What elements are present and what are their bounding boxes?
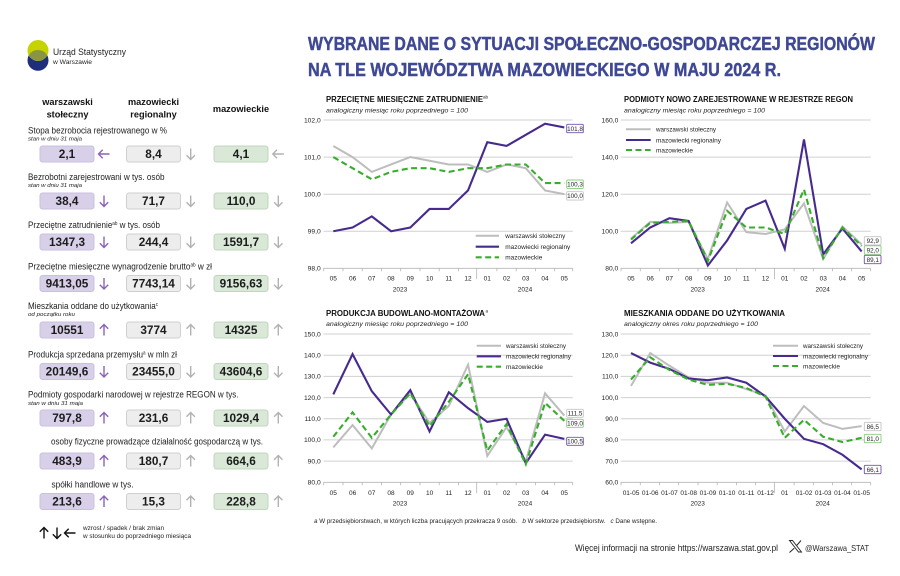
value labels: 89,1 [867, 257, 879, 264]
x axis labels: 10 [426, 490, 434, 497]
chart heading [624, 308, 785, 328]
x axis labels: 09 [704, 276, 712, 282]
x axis labels: 12 [762, 276, 769, 282]
panel: stopa bezrobocia: 4,1 [233, 147, 250, 161]
series: mazowiecki regionalny [631, 353, 862, 469]
legend: mazowiecki regionalny [505, 244, 571, 251]
panel: spółki handlowe [40, 480, 282, 510]
legend: mazowieckie [506, 364, 543, 371]
x axis labels: 08 [387, 490, 395, 497]
panel: produkcja sprzedana: 23455,0 [132, 365, 175, 379]
panel: spółki handlowe: 228,8 [226, 495, 256, 509]
panel: wynagrodzenie brutto [28, 262, 282, 292]
panel: mieszkania oddane [28, 301, 282, 338]
title [308, 33, 875, 80]
y axis labels: 120,0 [304, 395, 321, 402]
x axis labels [623, 490, 870, 508]
x axis labels: 07 [666, 276, 673, 282]
chart: mieszkania oddane do użytkowania [602, 308, 881, 508]
panel: przeciętne zatrudnienie: w tys. osób [117, 220, 160, 230]
panel: spółki handlowe: 213,6 [52, 495, 82, 509]
y axis labels: 160,0 [602, 117, 619, 124]
value labels [864, 237, 881, 264]
x axis labels: 12 [464, 276, 472, 282]
x axis labels: 06 [349, 276, 357, 282]
panel: osoby fizyczne: osoby fizyczne prowadzące działalność gospodarczą w tys. [51, 436, 263, 446]
y axis labels: 140,0 [602, 154, 619, 161]
logo: Urząd Statystyczny w Warszawie: w Warszawie [52, 59, 92, 66]
panel: bezrobotni zarejestrowani: 38,4 [56, 194, 79, 208]
series: mazowieckie [631, 189, 862, 261]
x axis labels: 04 [839, 276, 846, 282]
panel: przeciętne zatrudnienie: ab [112, 221, 118, 227]
x axis labels: 07 [368, 490, 376, 497]
logo: Urząd Statystyczny w Warszawie [28, 40, 126, 71]
y axis labels: 110,0 [602, 374, 619, 381]
x axis labels: 07 [368, 276, 376, 282]
y axis labels: 110,0 [304, 416, 321, 423]
y axis labels [602, 331, 619, 487]
y axis labels: 60,0 [605, 480, 619, 487]
chart heading [326, 94, 489, 114]
x axis labels: 04 [541, 276, 549, 282]
chart heading: a [486, 308, 488, 314]
x axis labels: 09 [407, 276, 414, 282]
series: warszawski stołeczny [333, 146, 564, 194]
panel: stopa bezrobocia: 8,4 [145, 147, 162, 161]
x axis labels: 04 [541, 490, 549, 497]
x axis labels: 11 [445, 276, 453, 282]
panel: osoby fizyczne [40, 436, 282, 469]
panel: stopa bezrobocia: Stopa bezrobocia rejestrowanego w % [28, 126, 167, 136]
x axis labels: 05 [858, 276, 866, 282]
y axis labels: 80,0 [605, 437, 619, 444]
x axis labels: 06 [349, 490, 357, 497]
x axis labels: 01-05 [853, 490, 870, 497]
panel: mieszkania oddane: 3774 [140, 323, 167, 337]
legend: mazowiecki regionalny [803, 353, 869, 360]
legend: warszawski stołeczny [504, 233, 566, 240]
x axis labels: 12 [464, 490, 472, 497]
x axis labels: 01 [781, 490, 789, 497]
x axis labels: 10 [723, 276, 731, 282]
panel: przeciętne zatrudnienie [28, 220, 282, 250]
x axis labels: 01-06 [642, 490, 659, 497]
chart: podmioty nowo zarejestrowane [602, 94, 881, 294]
value labels: 100,3 [567, 182, 583, 188]
x axis labels: 01-11 [738, 490, 755, 497]
x axis labels: 03 [522, 490, 530, 497]
x axis labels: 01-02 [796, 490, 813, 497]
y axis labels: 98,0 [308, 266, 321, 273]
panel: produkcja sprzedana: 20149,6 [46, 365, 89, 379]
x axis labels: 2023 [393, 286, 408, 294]
y axis labels: 140,0 [304, 352, 321, 360]
y axis labels: 150,0 [304, 331, 321, 338]
panel: bezrobotni zarejestrowani: 71,7 [142, 194, 165, 208]
column headings [41, 97, 269, 120]
chart heading: analogiczny miesiąc roku poprzedniego = 100 [326, 321, 468, 328]
series: mazowiecki regionalny [631, 139, 862, 265]
x axis labels: 01-07 [661, 490, 678, 497]
legend: mazowieckie [656, 147, 693, 154]
value labels: 109,0 [567, 421, 583, 428]
x axis labels: 01 [484, 490, 491, 497]
x axis labels [330, 490, 568, 508]
y axis labels: 100,0 [304, 192, 321, 198]
y axis labels: 130,0 [304, 374, 321, 381]
panel: podmioty REGON: 1029,4 [223, 411, 259, 425]
x axis labels: 01-08 [680, 490, 697, 497]
series: mazowieckie [333, 157, 564, 183]
series: warszawski stołeczny [631, 202, 862, 259]
panel: wynagrodzenie brutto: 7743,14 [132, 277, 175, 291]
panel: wynagrodzenie brutto: w zł [196, 262, 212, 272]
panel: produkcja sprzedana [28, 350, 282, 380]
value labels: 111,5 [568, 411, 583, 418]
panel: produkcja sprzedana: a [143, 350, 146, 356]
panel: przeciętne zatrudnienie: 1347,3 [49, 235, 85, 249]
value labels [567, 409, 583, 446]
x axis labels: 2024 [518, 286, 533, 294]
panel: osoby fizyczne: 483,9 [52, 454, 82, 468]
x axis labels: 01 [781, 276, 789, 282]
x axis labels [330, 276, 568, 294]
x axis labels: 03 [522, 276, 530, 282]
x axis labels: 02 [800, 276, 808, 282]
x axis labels: 01-04 [834, 490, 851, 497]
panel: osoby fizyczne: 664,6 [226, 454, 256, 468]
chart heading: analogiczny miesiąc roku poprzedniego = 100 [326, 107, 468, 114]
value labels: 92,0 [867, 247, 879, 254]
x axis labels: 11 [445, 490, 453, 497]
value labels: 100,5 [567, 439, 583, 446]
panel: podmioty REGON: Podmioty gospodarki narodowej w rejestrze REGON w tys. [28, 390, 238, 400]
panel: osoby fizyczne: 180,7 [139, 454, 169, 468]
x axis labels: 01-10 [719, 490, 736, 497]
title: NA TLE WOJEWÓDZTWA MAZOWIECKIEGO W MAJU 2024 R. [308, 59, 781, 80]
x axis labels: 01-03 [815, 490, 832, 497]
y axis labels [602, 117, 619, 273]
panel: bezrobotni zarejestrowani: stan w dniu 31 maja [28, 183, 82, 189]
x axis labels: 01-05 [623, 490, 640, 497]
x axis labels: 05 [561, 490, 568, 497]
x axis labels: 11 [743, 276, 750, 282]
value labels: 100,0 [567, 193, 583, 200]
x axis labels [627, 276, 866, 294]
column headings: regionalny [130, 110, 178, 120]
panel: przeciętne zatrudnienie: 244,4 [139, 235, 169, 249]
panel: bezrobotni zarejestrowani [28, 172, 282, 209]
legend: warszawski stołeczny [655, 127, 717, 134]
series: warszawski stołeczny [631, 353, 862, 431]
x axis labels: 01-12 [757, 490, 774, 497]
panel: mieszkania oddane: 14325 [225, 323, 258, 337]
x axis labels: 05 [627, 276, 635, 282]
legend: mazowieckie [803, 363, 840, 370]
x axis labels: 08 [685, 276, 693, 282]
y axis labels: 130,0 [602, 331, 619, 338]
x axis labels: 2024 [815, 500, 830, 508]
x axis labels: 06 [647, 276, 654, 282]
legend [476, 233, 571, 262]
value labels: 81,0 [867, 436, 879, 443]
column headings: stołeczny [47, 110, 89, 120]
column headings: warszawski [41, 97, 93, 107]
legend: warszawski stołeczny [505, 343, 567, 350]
legend [773, 343, 869, 370]
y axis labels [304, 117, 321, 273]
panel: mieszkania oddane: c [156, 302, 158, 308]
chart heading [624, 94, 853, 114]
footnote: a W przedsiębiorstwach, w których liczba pracujących przekracza 9 osób. b W sektorze przedsiębiorstw. c Dane wstępne. [314, 518, 657, 525]
legend: warszawski stołeczny [802, 343, 864, 350]
panel: wynagrodzenie brutto: 9156,63 [220, 277, 263, 291]
x axis labels: 2023 [393, 500, 408, 508]
y axis labels: 80,0 [605, 266, 619, 273]
value labels: 86,5 [867, 424, 879, 431]
legend: mazowieckie [505, 255, 543, 262]
y axis labels: 99,0 [308, 228, 321, 236]
panel: mieszkania oddane: Mieszkania oddane do użytkowania [28, 301, 167, 311]
series: mazowiecki regionalny [333, 354, 564, 463]
y axis labels: 100,0 [602, 395, 619, 402]
x axis labels: 08 [387, 276, 395, 282]
column headings: mazowieckie [213, 104, 269, 114]
y axis labels [304, 331, 321, 487]
y axis labels: 80,0 [308, 480, 321, 487]
arrow legend: wzrost / spadek / brak zmian [82, 525, 164, 532]
arrow legend: w stosunku do poprzedniego miesiąca [82, 533, 191, 540]
x axis labels: 05 [330, 276, 337, 282]
icon: X [790, 540, 802, 552]
y axis labels: 90,0 [605, 416, 619, 423]
panel: wynagrodzenie brutto: 9413,05 [46, 277, 89, 291]
y axis labels: 90,0 [308, 458, 321, 465]
x axis labels: 2024 [815, 286, 830, 294]
series: mazowieckie [631, 357, 862, 442]
chart heading: PRODUKCJA BUDOWLANO-MONTAŻOWA [326, 308, 485, 318]
panel: wynagrodzenie brutto: Przeciętne miesięczne wynagrodzenie brutto [28, 262, 203, 272]
y axis labels: 101,0 [304, 154, 321, 161]
panel: bezrobotni zarejestrowani: 110,0 [227, 194, 256, 208]
panel: stopa bezrobocia: stan w dniu 31 maja [28, 136, 82, 142]
y axis labels: 100,0 [304, 437, 321, 444]
footer link: Więcej informacji na stronie https://warszawa.stat.gov.pl [575, 543, 778, 553]
panel: produkcja sprzedana: 43604,6 [220, 365, 263, 379]
panel: podmioty REGON: 231,6 [139, 411, 169, 425]
series: warszawski stołeczny [333, 365, 564, 461]
chart: przeciętne miesięczne zatrudnienie [304, 94, 583, 294]
panel: podmioty REGON [28, 390, 282, 426]
value labels: 92,9 [867, 238, 879, 245]
x axis labels: 02 [503, 276, 511, 282]
series: mazowiecki regionalny [333, 124, 564, 231]
legend [477, 343, 572, 371]
y axis labels: 120,0 [602, 192, 619, 198]
x axis labels: 01 [484, 276, 491, 282]
panel: przeciętne zatrudnienie: Przeciętne zatrudnienie [28, 220, 120, 230]
x axis labels: 10 [426, 276, 434, 282]
panel: podmioty REGON: stan w dniu 31 maja [28, 401, 83, 407]
y axis labels: 120,0 [602, 352, 619, 360]
panel: stopa bezrobocia [28, 126, 284, 162]
x axis labels: 2023 [690, 500, 705, 508]
x axis labels: 2023 [690, 286, 705, 294]
x axis labels: 02 [503, 490, 511, 497]
x axis labels: 09 [407, 490, 414, 497]
chart heading: MIESZKANIA ODDANE DO UŻYTKOWANIA [624, 308, 785, 318]
x axis labels: 01-09 [700, 490, 717, 497]
legend [626, 127, 722, 154]
arrow legend [40, 525, 191, 540]
x axis labels: 03 [820, 276, 827, 282]
chart: produkcja budowlano-montażowa [304, 308, 583, 508]
panel: podmioty REGON: 797,8 [52, 411, 82, 425]
footer handle: @Warszawa_STAT [805, 543, 869, 553]
legend: mazowiecki regionalny [506, 354, 572, 361]
chart heading: analogiczny miesiąc roku poprzedniego = 100 [624, 107, 765, 114]
value labels [864, 422, 881, 474]
panel: mieszkania oddane: 10551 [51, 323, 84, 337]
series: mazowieckie [333, 374, 564, 464]
column headings: mazowiecki [128, 97, 179, 107]
chart heading [326, 308, 488, 328]
panel: spółki handlowe: spółki handlowe w tys. [52, 480, 134, 490]
panel: produkcja sprzedana: w mln zł [146, 350, 177, 360]
logo: Urząd Statystyczny w Warszawie: Urząd Statystyczny [53, 46, 126, 57]
panel: wynagrodzenie brutto: ab [190, 262, 196, 268]
y axis labels: 102,0 [304, 117, 321, 124]
x axis labels: 05 [330, 490, 337, 497]
chart heading: PRZECIĘTNE MIESIĘCZNE ZATRUDNIENIE [326, 94, 483, 104]
value labels: 101,8 [567, 126, 583, 133]
value labels: 66,1 [867, 467, 879, 474]
panel: mieszkania oddane: od początku roku [28, 312, 75, 318]
chart heading: ab [483, 94, 489, 100]
chart heading: analogiczny okres roku poprzedniego = 100 [624, 321, 758, 328]
x axis labels: 2024 [518, 500, 533, 508]
y axis labels: 70,0 [605, 458, 619, 465]
x axis labels: 05 [561, 276, 568, 282]
panel: produkcja sprzedana: Produkcja sprzedana przemysłu [28, 350, 153, 360]
panel: przeciętne zatrudnienie: 1591,7 [223, 235, 259, 249]
panel: bezrobotni zarejestrowani: Bezrobotni zarejestrowani w tys. osób [28, 172, 165, 182]
panel: spółki handlowe: 15,3 [142, 495, 165, 509]
chart heading: PODMIOTY NOWO ZAREJESTROWANE W REJESTRZE REGON [624, 94, 853, 104]
panel: stopa bezrobocia: 2,1 [59, 147, 76, 161]
legend: mazowiecki regionalny [656, 137, 722, 144]
value labels [567, 124, 583, 200]
y axis labels: 100,0 [602, 228, 619, 236]
